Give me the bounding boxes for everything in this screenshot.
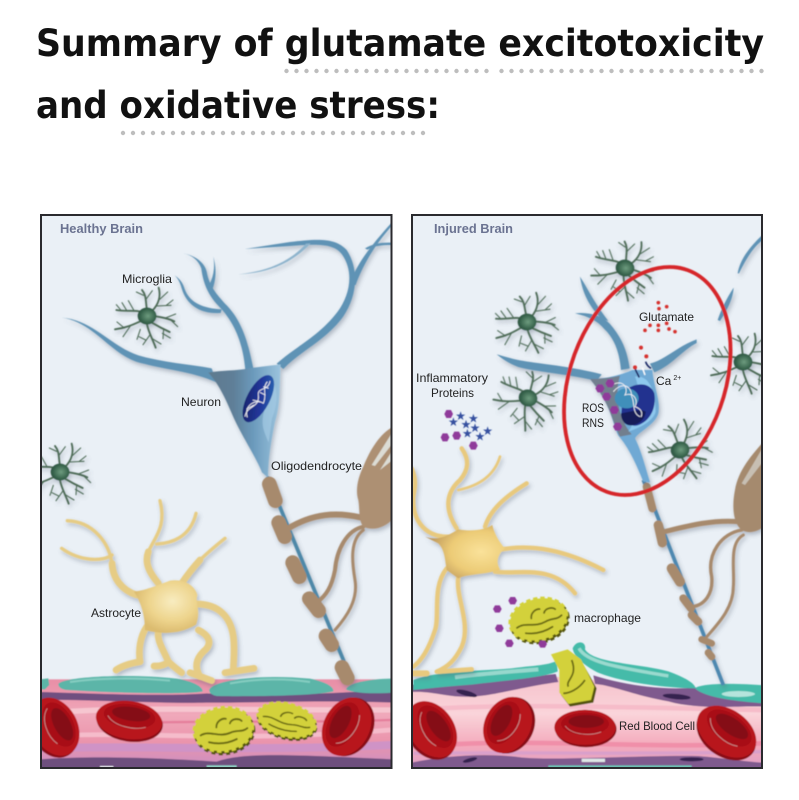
inflammatory protein cluster: ★ xyxy=(462,427,473,441)
red blood cell xyxy=(554,710,617,747)
microglia xyxy=(493,291,560,356)
oligodendrocyte and axon xyxy=(267,427,393,680)
dotted underline: oxidative stress xyxy=(123,131,426,135)
platelet xyxy=(191,704,257,758)
inflammatory protein cluster: ★ xyxy=(448,415,459,429)
dotted underline: glutamate xyxy=(286,69,487,73)
receptors and calcium arrow xyxy=(635,362,651,378)
label: ROS RNS: RNS xyxy=(582,416,604,430)
blood vessel (injured) xyxy=(393,642,767,771)
label: Inflammatory Proteins: Proteins xyxy=(431,386,474,400)
inflammatory protein cluster: ★ xyxy=(470,421,480,435)
title: Summary of glutamate excitotoxicity xyxy=(36,22,764,65)
microglia xyxy=(42,442,92,508)
red blood cell xyxy=(321,697,376,757)
label: Oligodendrocyte: Oligodendrocyte xyxy=(271,459,362,473)
title: and oxidative stress: xyxy=(36,84,440,127)
label: Ca2+: Ca xyxy=(656,374,671,388)
nucleus with DNA xyxy=(242,374,275,423)
microglia xyxy=(590,240,655,305)
nucleus xyxy=(612,383,655,426)
label: ROS RNS: ROS xyxy=(582,401,604,415)
platelet xyxy=(256,700,318,742)
dotted underline: excitotoxicity xyxy=(502,69,763,73)
red blood cell xyxy=(696,705,757,762)
label: macrophage: macrophage xyxy=(574,611,641,625)
endothelial cells xyxy=(40,676,393,696)
label: Healthy Brain: Healthy Brain xyxy=(60,222,143,236)
astrocyte xyxy=(412,448,603,673)
label: Inflammatory Proteins xyxy=(416,371,488,400)
red blood cell xyxy=(413,700,458,760)
red circle around damaged neuron xyxy=(561,264,734,498)
ROS RNS hexagons xyxy=(595,379,622,431)
microglia xyxy=(646,418,714,482)
red blood cell xyxy=(42,697,80,758)
astrocyte xyxy=(62,501,254,681)
microglia xyxy=(492,370,559,435)
label: Microglia: Microglia xyxy=(122,272,172,286)
inflammatory protein cluster: ★ xyxy=(461,417,471,431)
microglia xyxy=(115,288,178,348)
label: Ca2+: 2+ xyxy=(673,375,681,382)
inflammatory protein cluster: ★ xyxy=(475,429,485,443)
inflammatory protein cluster: ★ xyxy=(468,412,479,426)
damaged neuron xyxy=(497,235,762,482)
label: Red Blood Cell: Red Blood Cell xyxy=(619,719,695,733)
inflammatory protein cluster xyxy=(441,409,493,450)
axon and myelin fragments xyxy=(643,440,765,685)
extravasating platelet xyxy=(551,649,597,707)
label: Astrocyte: Astrocyte xyxy=(91,606,141,620)
microglia xyxy=(710,332,761,398)
glutamate dots xyxy=(633,301,677,369)
label: Glutamate: Glutamate xyxy=(639,310,694,324)
red blood cell xyxy=(95,700,164,742)
panel: injured brain xyxy=(393,215,774,771)
panel: healthy brain xyxy=(18,215,393,769)
label: Injured Brain: Injured Brain xyxy=(434,222,513,236)
red blood cell xyxy=(482,696,536,754)
label: ROS RNS xyxy=(582,401,604,430)
neuron xyxy=(62,223,392,478)
label: Inflammatory Proteins: Inflammatory xyxy=(416,371,488,385)
inflammatory protein cluster: ★ xyxy=(482,424,493,438)
macrophage with proteins xyxy=(493,592,573,649)
title xyxy=(36,22,764,127)
endothelial cells xyxy=(413,642,763,703)
label: Neuron: Neuron xyxy=(181,395,221,409)
inflammatory protein cluster: ★ xyxy=(455,409,466,423)
blood vessel (healthy) xyxy=(18,676,393,769)
